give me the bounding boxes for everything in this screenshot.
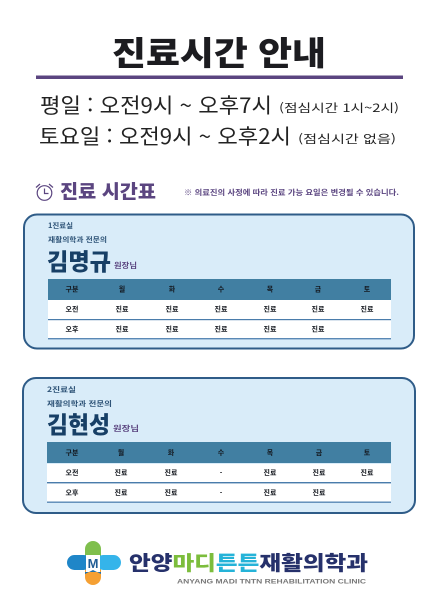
title: 진료시간 안내 <box>112 27 326 75</box>
schedule table 1: 오후 <box>66 324 79 334</box>
schedule table 1: 목 <box>267 284 274 294</box>
schedule table 2: 진료 <box>264 488 277 498</box>
schedule table 1: 진료 <box>264 304 277 314</box>
hours: weekdays: (점심시간 1시~2시) <box>279 100 399 116</box>
schedule table 2: 월 <box>118 448 124 458</box>
logo mark: medical cross: M <box>88 556 98 571</box>
logo mark: medical cross <box>67 541 121 585</box>
specialty label: 재활의학과 전문의 <box>48 235 107 245</box>
schedule table 2: 진료 <box>313 488 326 498</box>
schedule table 1: 금 <box>315 284 322 294</box>
panel: clinic room 2 <box>23 378 415 513</box>
doctor title: 원장님 <box>114 260 137 271</box>
hours: saturday: 토요일 : 오전9시 ~ 오후2시 <box>39 121 291 151</box>
doctor name: 김명규 <box>47 243 111 277</box>
title underline <box>36 76 403 79</box>
hours: weekdays: 평일 : 오전9시 ~ 오후7시 <box>40 90 272 120</box>
hours: saturday: (점심시간 없음) <box>298 131 396 147</box>
schedule table 2: 진료 <box>264 468 277 478</box>
schedule table 2: 수 <box>218 448 225 458</box>
schedule table 1: 진료 <box>312 304 325 314</box>
logo wordmark: 안양 마디 튼튼 재활의학과 <box>129 547 368 576</box>
schedule table 1: 오전 <box>66 304 78 314</box>
hours: saturday <box>39 121 396 151</box>
schedule table 2: 진료 <box>115 468 128 478</box>
schedule table 2: 화 <box>168 448 175 458</box>
schedule table 2: - <box>220 468 223 478</box>
room label: 1진료실 <box>48 221 73 231</box>
doctor name: 김현성 <box>47 406 110 440</box>
doctor title: 원장님 <box>113 423 139 434</box>
panel: clinic room 1 <box>24 214 414 348</box>
schedule table 1: 구분 <box>66 284 79 294</box>
schedule table 1: 진료 <box>361 304 374 314</box>
schedule table 2: 오후 <box>66 488 79 498</box>
icon: alarm clock <box>36 184 53 200</box>
schedule table 2: 진료 <box>165 488 178 498</box>
schedule table 2: 진료 <box>165 468 178 478</box>
hours: weekdays <box>40 90 399 120</box>
schedule table 2: 진료 <box>361 468 374 478</box>
schedule table 1: 화 <box>169 284 176 294</box>
schedule table 2: 구분 <box>66 448 79 458</box>
schedule table 1: 진료 <box>215 324 228 334</box>
logo subtitle: ANYANG MADI TNTN REHABILITATION CLINIC <box>177 578 366 586</box>
schedule table 2: 진료 <box>115 488 128 498</box>
schedule table 2: 금 <box>316 448 323 458</box>
schedule table 2: 목 <box>267 448 274 458</box>
specialty label: 재활의학과 전문의 <box>47 399 112 409</box>
schedule table 2 <box>47 442 391 503</box>
schedule table 1: 진료 <box>166 304 179 314</box>
schedule table 2: 토 <box>364 448 371 458</box>
schedule table 1: 진료 <box>166 324 179 334</box>
schedule table 1 <box>48 279 391 339</box>
schedule table 2: - <box>220 488 223 498</box>
schedule table 1: 수 <box>218 284 225 294</box>
schedule table 1: 월 <box>119 284 125 294</box>
schedule table 1: 진료 <box>116 304 129 314</box>
schedule table 1: 진료 <box>264 324 277 334</box>
schedule table 2: 진료 <box>313 468 326 478</box>
schedule table 2: 오전 <box>66 468 78 478</box>
schedule table 1: 진료 <box>215 304 228 314</box>
schedule notice: ※ 의료진의 사정에 따라 진료 가능 요일은 변경될 수 있습니다. <box>184 187 399 198</box>
schedule table 1: 토 <box>364 284 371 294</box>
schedule heading: 진료 시간표 <box>60 177 156 204</box>
room label: 2진료실 <box>47 385 76 395</box>
schedule table 1: 진료 <box>116 324 129 334</box>
schedule table 1: 진료 <box>312 324 325 334</box>
